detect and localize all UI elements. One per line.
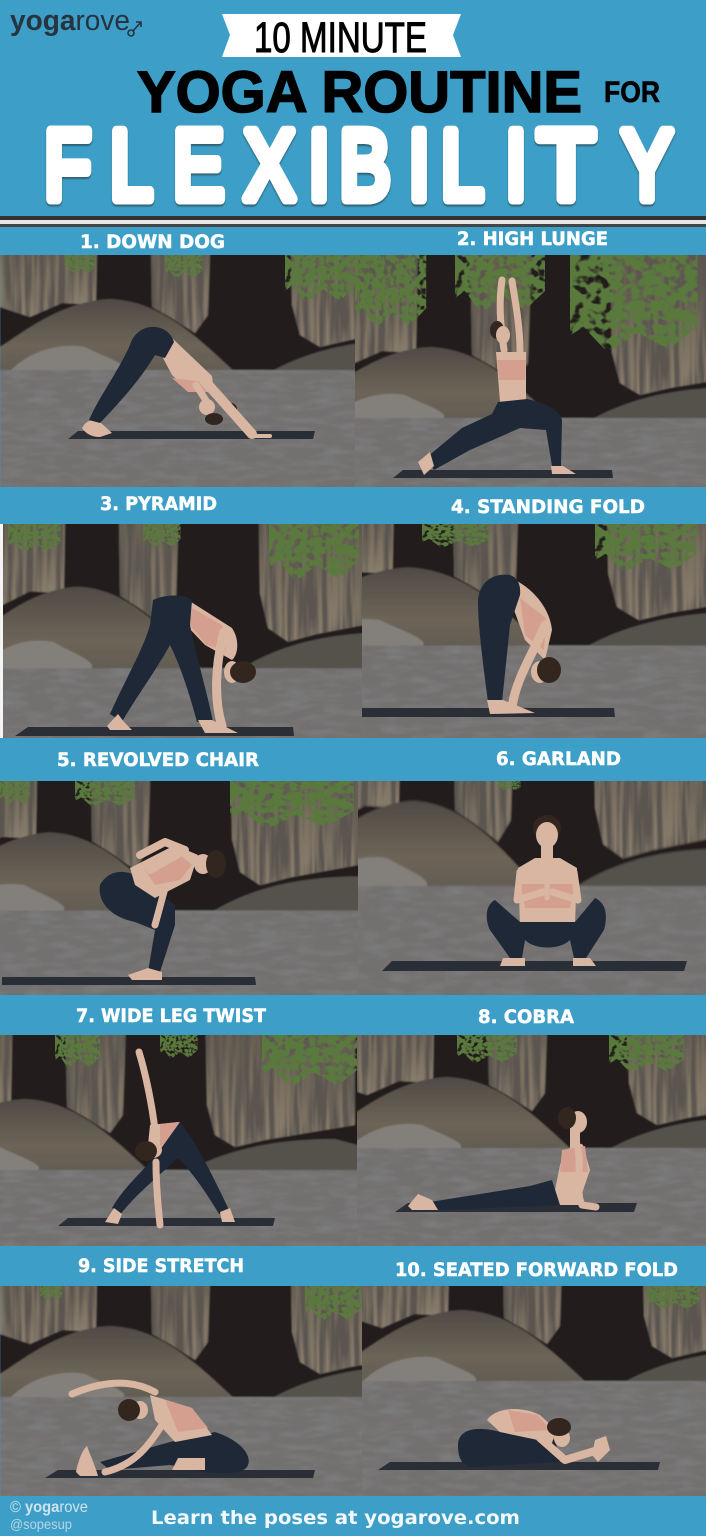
label: 10 seated forward fold: 10. SEATED FORWARD FOLD [395, 1259, 678, 1281]
divider lines [0, 216, 706, 227]
heading: flexibility: I [408, 110, 430, 220]
panel: pose 10 seated forward fold [352, 1206, 706, 1502]
label: 4 standing fold: 4. STANDING FOLD [451, 496, 645, 518]
heading: flexibility: T [538, 111, 595, 221]
figure: wide leg twist [58, 1052, 275, 1226]
panel: pose 2 high lunge [320, 195, 706, 539]
footer handle: @sopesup: @sopesup [10, 1516, 72, 1532]
panel: pose 3 pyramid [0, 464, 418, 807]
photo backdrop [362, 1286, 706, 1496]
label: 9 side stretch: 9. SIDE STRETCH [78, 1255, 244, 1277]
photo backdrop [3, 524, 362, 738]
heading: flexibility [44, 110, 673, 221]
figure: standing fold [362, 575, 615, 717]
header [0, 5, 706, 227]
panel: pose 7 wide leg twist [0, 980, 365, 1291]
panel: pose 9 side stretch [0, 1222, 450, 1518]
photo backdrop [357, 1035, 706, 1246]
panel: pose 6 garland [303, 676, 706, 1031]
figure: cobra [395, 1107, 637, 1212]
photo backdrop [355, 255, 706, 487]
panel: pose 4 standing fold [287, 453, 706, 779]
photo backdrop [0, 1286, 362, 1496]
photo backdrop [362, 524, 706, 738]
footer logo: yogarove copyright: © yogarove [10, 1499, 88, 1516]
heading: flexibility: B [340, 110, 391, 220]
figure: side stretch [45, 1383, 315, 1478]
figure: high lunge [393, 280, 613, 478]
heading: flexibility: E [173, 110, 224, 220]
heading: flexibility: L [441, 110, 484, 220]
heading: flexibility: I [505, 110, 527, 220]
label: 8 cobra: 8. COBRA [478, 1006, 574, 1028]
heading: flexibility: I [308, 110, 330, 220]
footer [10, 1499, 520, 1532]
photo backdrop [0, 255, 355, 487]
panel: pose 1 down dog [0, 195, 450, 491]
label: 3 pyramid: 3. PYRAMID [100, 493, 217, 515]
label: 2 high lunge: 2. HIGH LUNGE [457, 228, 608, 250]
heading: yoga routine: YOGA ROUTINE [137, 60, 582, 125]
banner: 10 minute: 10 MINUTE [254, 14, 427, 62]
photo backdrop [358, 781, 706, 995]
figure: down dog [68, 327, 315, 439]
figure: revolved chair [2, 842, 256, 985]
heading: flexibility: F [44, 110, 91, 220]
footer call to action: Learn the poses at yogarove.com [151, 1507, 520, 1529]
photo backdrop [0, 1035, 357, 1246]
panel: pose 5 revolved chair [0, 718, 390, 1044]
label: 7 wide leg twist: 7. WIDE LEG TWIST [76, 1005, 266, 1027]
icon: logo arrow [128, 22, 141, 36]
label: 1 down dog: 1. DOWN DOG [80, 231, 225, 253]
figure: seated forward fold [378, 1409, 660, 1470]
heading: flexibility: Y [622, 110, 673, 220]
heading: flexibility: L [110, 110, 152, 220]
panel: pose 8 cobra [337, 973, 706, 1269]
label: 6 garland: 6. GARLAND [496, 748, 621, 770]
label: 5 revolved chair: 5. REVOLVED CHAIR [57, 749, 259, 771]
heading: flexibility: X [244, 110, 295, 220]
heading: for: FOR [604, 76, 660, 109]
figure: pyramid [15, 596, 294, 736]
logo: yogarove: yogarove [10, 5, 130, 37]
figure: garland [382, 815, 687, 971]
white sliver beside pose 3 [0, 524, 3, 738]
photo backdrop [0, 781, 358, 995]
